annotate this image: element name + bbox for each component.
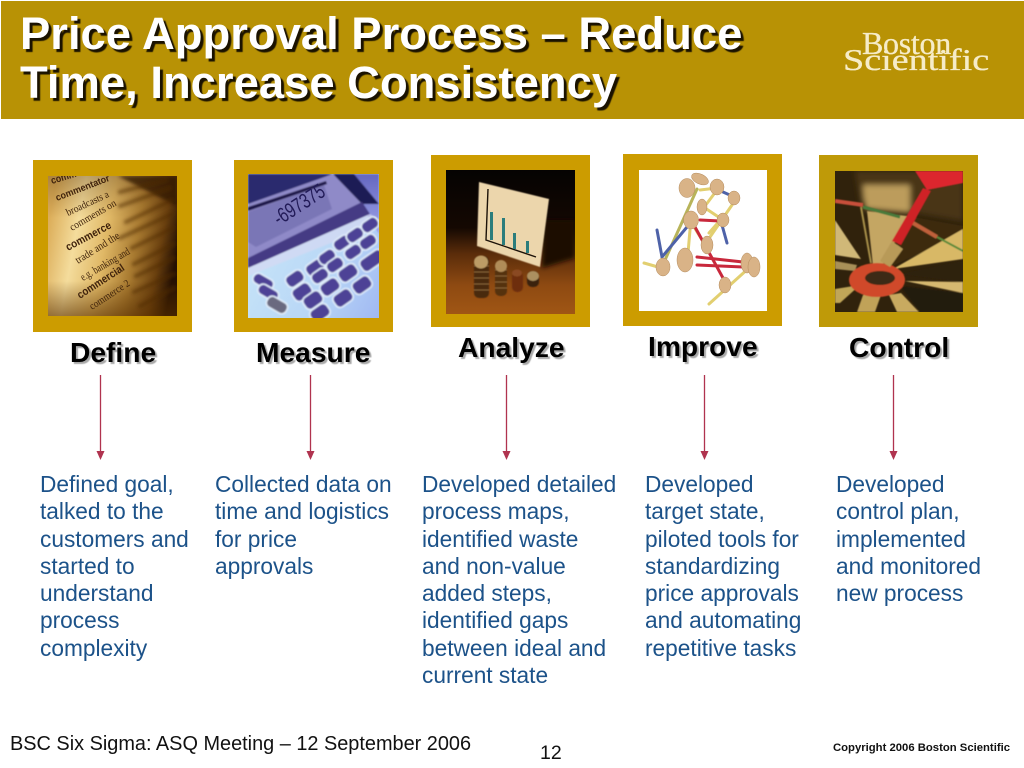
panel: Control image	[819, 155, 978, 327]
title: Price Approval Process – Reduce	[20, 8, 742, 59]
text: Improve description: and automating	[645, 607, 801, 633]
heading: Improve: Improve	[648, 330, 758, 362]
text: Analyze description: identified waste	[422, 526, 578, 552]
text: Define description: understand	[40, 580, 154, 606]
text: Measure description: approvals	[215, 553, 313, 579]
heading: Analyze: Analyze	[458, 331, 565, 363]
logo: Boston Scientific: Boston	[862, 25, 951, 61]
heading: Define: Define	[70, 336, 156, 368]
image: dictionary page: broadcasts a	[65, 189, 111, 219]
text: Control description: implemented	[836, 526, 966, 552]
arrow: Define	[96, 375, 104, 460]
text: Analyze description: Developed detailed	[422, 471, 616, 497]
title	[20, 8, 744, 112]
text: Analyze description	[422, 471, 616, 688]
text: Improve description: price approvals	[645, 580, 799, 606]
title banner	[1, 1, 1024, 119]
text: Measure description: Collected data on	[215, 471, 392, 497]
text: Define description: customers and	[40, 526, 189, 552]
arrow: Improve	[700, 375, 708, 460]
footer: meeting name: BSC Six Sigma: ASQ Meeting – 12 September 2006	[10, 733, 471, 755]
image: dictionary page: trade and the	[73, 230, 122, 267]
text: Control description: Developed	[836, 471, 944, 497]
image: dart in bullseye	[835, 171, 963, 312]
text: Analyze description: between ideal and	[422, 635, 606, 661]
text: Control description	[836, 471, 981, 606]
panel: Improve image	[623, 154, 782, 326]
text: Analyze description: and non-value	[422, 553, 566, 579]
text: Analyze description: current state	[422, 662, 548, 688]
text: Analyze description: identified gaps	[422, 607, 568, 633]
text: Define description: process	[40, 607, 119, 633]
text: Define description	[40, 471, 189, 661]
image: chart and coins	[446, 170, 575, 314]
image: dictionary page: e.g. banking and	[78, 246, 132, 284]
text: Analyze description: added steps,	[422, 580, 552, 606]
text: Control description: control plan,	[836, 498, 960, 524]
image: dictionary page: commercial	[75, 262, 127, 302]
text: Define description: talked to the	[40, 498, 164, 524]
text: Define description: started to	[40, 553, 135, 579]
footer: page number: 12	[540, 742, 562, 764]
image: calculator	[248, 174, 379, 318]
panel: Analyze image	[431, 155, 590, 327]
text: Define description: Defined goal,	[40, 471, 174, 497]
arrow: Analyze	[502, 375, 510, 460]
logo: Boston Scientific	[843, 25, 989, 77]
panel: Measure image	[234, 160, 393, 332]
text: Control description: new process	[836, 580, 963, 606]
footer: copyright: Copyright 2006 Boston Scientific	[833, 742, 1010, 754]
title: Time, Increase Consistency	[20, 56, 617, 108]
image: dictionary page: comments on	[68, 198, 119, 234]
image: dictionary page: commerce 2	[88, 278, 132, 313]
logo: Boston Scientific: Scientific	[843, 42, 989, 77]
text: Analyze description: process maps,	[422, 498, 570, 524]
text: Define description: complexity	[40, 635, 147, 661]
image: construction toy	[639, 170, 767, 311]
text: Improve description: Developed	[645, 471, 753, 497]
text: Improve description: target state,	[645, 498, 765, 524]
text: Improve description: repetitive tasks	[645, 635, 796, 661]
text: Improve description: standardizing	[645, 553, 780, 579]
text: Improve description: piloted tools for	[645, 526, 799, 552]
text: Measure description	[215, 471, 392, 579]
text: Improve description	[645, 471, 801, 661]
arrow: Measure	[306, 375, 314, 460]
text: Measure description: for price	[215, 526, 297, 552]
image: dictionary page	[48, 176, 177, 316]
text: Control description: and monitored	[836, 553, 981, 579]
heading: Measure: Measure	[256, 336, 370, 368]
text: Measure description: time and logistics	[215, 498, 389, 524]
arrow: Control	[890, 375, 898, 460]
panel: Define image	[33, 160, 192, 332]
heading: Control: Control	[849, 331, 949, 363]
image: dictionary page: commerce	[64, 220, 114, 254]
